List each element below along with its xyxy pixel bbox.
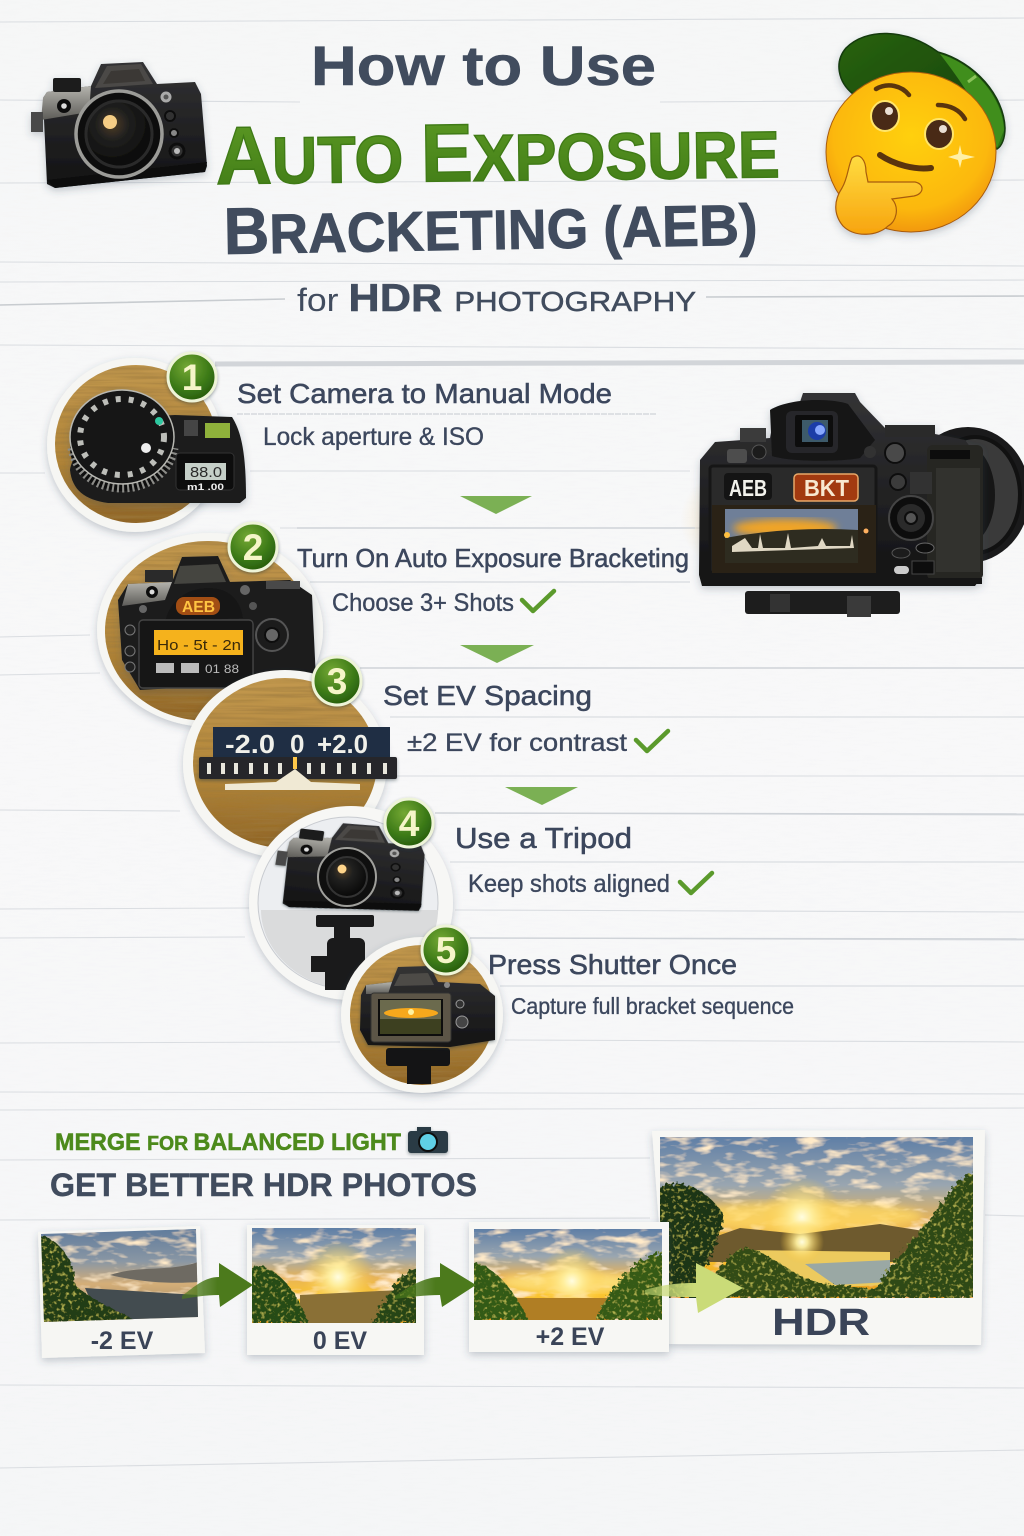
- live view photo: [380, 1000, 441, 1034]
- camera body: [118, 556, 316, 690]
- lens: [318, 848, 376, 906]
- badge 4: [385, 799, 433, 847]
- frame: [341, 937, 503, 1093]
- photo: HDR result: [652, 1130, 985, 1345]
- EV readout panel: +2.0: [317, 729, 368, 759]
- camera body: [360, 966, 495, 1047]
- badge 5: 5: [436, 930, 456, 971]
- step 5 text: Press Shutter Once: [488, 949, 737, 980]
- icon: thinking emoji with green cap: [826, 33, 1005, 234]
- frame: [249, 806, 453, 1000]
- step 4 text: Keep shots aligned: [468, 870, 670, 898]
- photo: 0 EV: 0 EV: [313, 1327, 367, 1355]
- merge heading: MERGE FOR BALANCED LIGHT: [55, 1129, 401, 1156]
- arrow: -2 EV to 0 EV: [182, 1263, 253, 1307]
- badge 4: 4: [399, 803, 420, 844]
- step number badges: [168, 353, 470, 974]
- step 4 text: Use a Tripod: [455, 823, 632, 855]
- step 5 text: Capture full bracket sequence: [511, 993, 794, 1019]
- AEB label: [176, 597, 220, 616]
- check mark 4: [680, 873, 712, 893]
- get better HDR photos heading: GET BETTER HDR PHOTOS: [50, 1167, 477, 1203]
- step dividers: [215, 362, 1024, 986]
- EV readout panel: 0: [290, 729, 304, 759]
- step 2 text: Turn On Auto Exposure Bracketing: [297, 543, 689, 573]
- badge 3: [313, 657, 361, 705]
- EV readout panel: -2.0: [225, 729, 275, 759]
- arrow: +2 EV to HDR: [645, 1263, 743, 1313]
- photo: -2 EV: [38, 1226, 205, 1358]
- step 1 text: Set Camera to Manual Mode: [237, 378, 612, 409]
- live view photo: [724, 509, 868, 563]
- tripod plate: [745, 591, 900, 617]
- photo: +2 EV: [469, 1222, 669, 1352]
- EV scale bar: [199, 757, 397, 779]
- lens behind body: [906, 427, 1024, 563]
- right hero camera back with AEB BKT display: [680, 393, 1024, 617]
- step 5 illustration: camera live view: [341, 937, 503, 1093]
- step 2 text: [297, 543, 689, 617]
- arrow down 2: [460, 645, 534, 663]
- photo: HDR result: HDR: [772, 1302, 870, 1344]
- step 1 text: Lock aperture & ISO: [263, 423, 484, 451]
- EV readout panel: [213, 727, 390, 759]
- EV pointer: [225, 769, 360, 790]
- arrow: 0 EV to +2 EV: [395, 1263, 476, 1307]
- badge 5: [422, 926, 470, 974]
- photo: 0 EV: [247, 1225, 424, 1355]
- lcd scribble: Ho - 5t - 2n: [157, 637, 241, 654]
- frame: [47, 358, 223, 532]
- step 2 text: Choose 3+ Shots: [332, 589, 514, 617]
- check mark 2: [522, 591, 554, 611]
- step 3 text: Set EV Spacing: [383, 680, 592, 711]
- step 2 illustration: camera with AEB lcd: [97, 533, 323, 727]
- mount: [386, 1048, 450, 1084]
- title: [0, 34, 1024, 320]
- step 5 text: [488, 949, 794, 1019]
- frame: [183, 670, 387, 858]
- camera top: [70, 390, 246, 503]
- step 3 illustration: EV scale: [183, 670, 397, 858]
- title line: Bracketing (AEB): BRACKETING (AEB): [223, 185, 758, 268]
- check mark 3: [636, 731, 668, 751]
- AEB badge: AEB: [729, 475, 767, 501]
- camera body: [699, 393, 983, 586]
- step 3 text: ±2 EV for contrast: [407, 729, 627, 757]
- photo: +2 EV: +2 EV: [536, 1323, 605, 1351]
- lcd readout: 88.0: [190, 464, 222, 481]
- title line: How to Use: How to Use: [311, 34, 656, 97]
- frame: [97, 533, 323, 727]
- BKT badge: BKT: [804, 475, 849, 501]
- AEB label: AEB: [182, 599, 215, 616]
- arrow down 3: [505, 787, 578, 805]
- arrow down 1: [460, 496, 532, 514]
- badge 3: 3: [327, 661, 347, 702]
- title line: Auto Exposure: AUTO EXPOSURE: [215, 104, 780, 202]
- step 4 text: [455, 823, 712, 898]
- step 3 text: [383, 680, 668, 757]
- badge 2: 2: [243, 527, 263, 568]
- tripod head: [311, 915, 374, 990]
- icon: small camera: [408, 1127, 448, 1153]
- badge 1: [168, 353, 216, 401]
- photo: -2 EV: -2 EV: [91, 1327, 154, 1355]
- step 1 illustration: mode dial: [47, 358, 246, 532]
- step 1 text: [237, 378, 612, 451]
- lcd sub readout: m1 .00: [187, 482, 224, 493]
- icon: vintage camera: [31, 62, 207, 188]
- lcd counter: 01 88: [205, 662, 239, 676]
- camera: [269, 815, 434, 922]
- badge 2: [229, 523, 277, 571]
- badge 1: 1: [182, 357, 202, 398]
- subtitle: for HDR PHOTOGRAPHY: [297, 277, 696, 320]
- step 4 illustration: camera on tripod: [249, 806, 453, 1000]
